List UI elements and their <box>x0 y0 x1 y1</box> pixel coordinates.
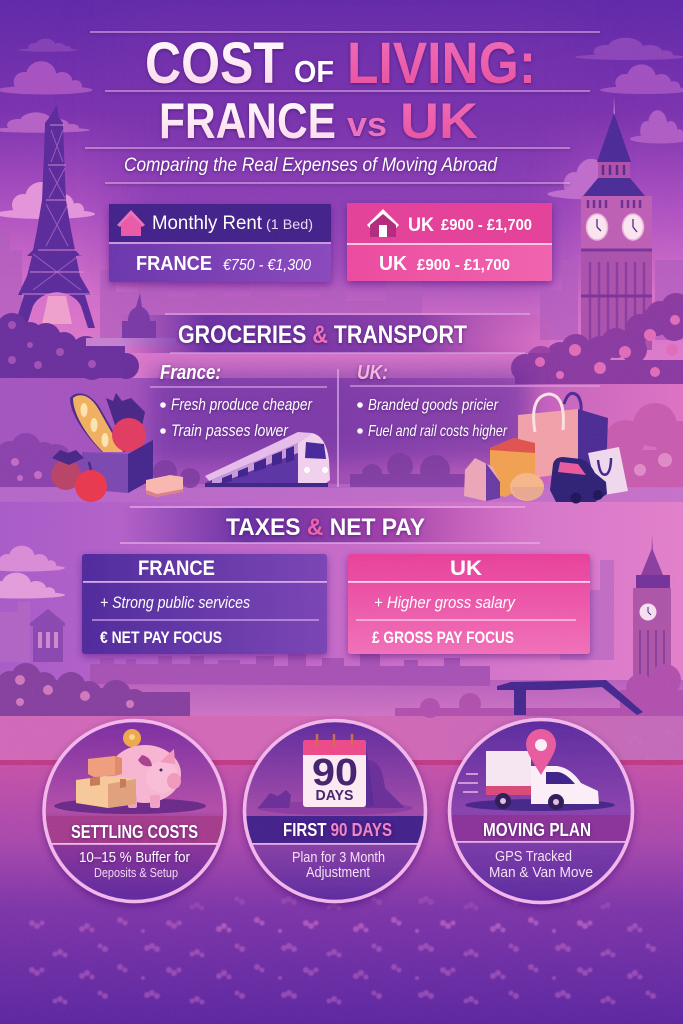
title: FRANCE <box>159 93 336 149</box>
title: COST <box>145 31 284 96</box>
icon: piggy bank with coin <box>109 729 181 808</box>
settling costs line 1: 10–15 % Buffer for <box>79 850 190 866</box>
hedges and bridge: lower section <box>0 663 683 718</box>
France heading: FRANCE <box>138 557 215 580</box>
title: LIVING: <box>347 31 536 96</box>
UK heading: UK <box>450 557 482 580</box>
icon: house <box>117 210 145 236</box>
landmark: pagoda <box>30 609 65 662</box>
landmark: Big Ben <box>581 97 652 350</box>
icon: house <box>367 209 399 237</box>
UK rent range: £900 - £1,700 <box>441 217 532 234</box>
distant skyline: France and UK <box>0 224 683 351</box>
title: vs <box>347 106 387 144</box>
icon: calendar: 90 <box>312 752 358 794</box>
UK groceries text: Branded goods pricier <box>368 397 499 414</box>
subtitle: Comparing the Real Expenses of Moving Abroad <box>124 155 498 176</box>
banner: groceries and transport: GROCERIES & TRANSPORT <box>178 321 467 349</box>
France rent range: €750 - €1,300 <box>223 257 311 274</box>
divider <box>337 369 339 487</box>
landmark: French monument <box>86 293 176 346</box>
settling costs heading: SETTLING COSTS <box>71 821 198 842</box>
settling costs line 2: Deposits & Setup <box>94 865 178 880</box>
field flowers <box>25 725 680 1010</box>
icon: cardboard boxes <box>76 756 136 808</box>
first 90 days line 1: Plan for 3 Month <box>292 850 385 866</box>
icon: train <box>205 432 330 487</box>
UK benefit: + Higher gross salary <box>374 593 516 612</box>
moving plan heading: MOVING PLAN <box>483 819 591 840</box>
UK groceries text: UK: <box>357 362 388 384</box>
first 90 days heading: FIRST 90 DAYS <box>283 819 392 840</box>
UK groceries text <box>350 362 600 440</box>
rent qualifier: (1 Bed) <box>266 216 313 232</box>
panel: France taxes <box>82 554 327 654</box>
France groceries text: Fresh produce cheaper <box>171 396 313 414</box>
rent heading: Monthly Rent <box>152 213 263 234</box>
panel: France rent <box>109 204 331 282</box>
hedges: middle section <box>0 403 683 488</box>
UK label: UK <box>408 215 434 236</box>
panel: UK taxes <box>348 554 590 654</box>
France groceries text: Train passes lower <box>171 422 289 440</box>
UK label lower: UK <box>379 253 408 275</box>
first 90 days line 2: Adjustment <box>306 865 370 881</box>
UK rent range lower: £900 - £1,700 <box>417 257 510 274</box>
badge: settling costs <box>40 720 230 902</box>
title <box>85 31 600 183</box>
icon: calendar: DAYS <box>316 788 354 804</box>
landmark: small Big Ben <box>633 535 671 680</box>
banner: groceries and transport <box>120 314 550 353</box>
title: UK <box>400 93 478 149</box>
UK pay focus: £ GROSS PAY FOCUS <box>372 629 514 647</box>
moving plan line 2: Man & Van Move <box>489 864 593 881</box>
badge: first 90 days <box>240 720 430 902</box>
banner: taxes and net pay: TAXES & NET PAY <box>226 514 425 541</box>
UK groceries text: Fuel and rail costs higher <box>368 423 508 440</box>
panel: UK rent <box>347 203 552 281</box>
icon: calendar <box>303 734 374 808</box>
France benefit: + Strong public services <box>100 593 250 612</box>
lower skyline and landmarks <box>0 535 683 716</box>
icon: groceries crate with bread and apples <box>51 393 183 502</box>
moving plan line 1: GPS Tracked <box>495 848 572 865</box>
banner: taxes and net pay <box>120 507 540 543</box>
France label: FRANCE <box>136 253 212 275</box>
title: OF <box>294 54 334 89</box>
hedge: upper left <box>0 313 139 380</box>
backdrop behind groceries text <box>150 368 530 463</box>
badge: moving plan <box>445 719 640 903</box>
France pay focus: € NET PAY FOCUS <box>100 629 222 647</box>
clouds <box>0 38 683 599</box>
France groceries text: France: <box>160 362 221 384</box>
landmark: Eiffel Tower <box>14 105 95 328</box>
icon: shopping bags and groceries <box>464 393 628 504</box>
France groceries text <box>150 362 327 440</box>
hedge: upper right <box>511 293 683 384</box>
icon: van with location pin <box>458 729 599 810</box>
